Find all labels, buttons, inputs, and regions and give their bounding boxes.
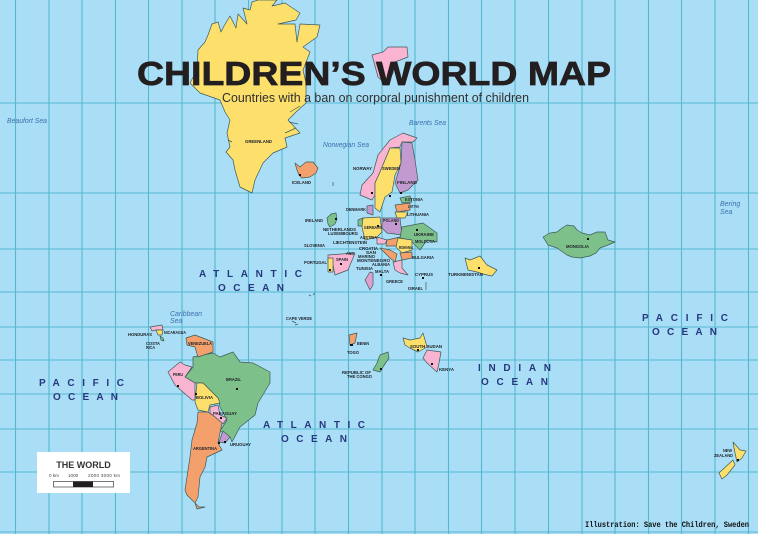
country labels: CYPRUS [415,272,434,278]
country labels: DENMARK [346,207,366,213]
Spain [328,253,355,275]
Uruguay [219,431,230,443]
sea labels: Sea [170,318,183,325]
Nicaragua [156,330,163,335]
country labels: MONGOLIA [566,244,589,250]
Greenland [190,0,320,193]
country labels: COSTA [146,341,160,347]
capital markers [177,174,739,461]
Denmark [367,205,373,215]
country labels: BULGARIA [412,255,434,261]
country labels: ZEALAND [714,453,733,459]
Republic of the Congo [373,352,389,372]
country labels: TOGO [347,350,359,356]
country labels: PORTUGAL [304,260,327,266]
ocean labels [39,269,728,445]
country labels: FINLAND [397,180,417,186]
sea labels: Barents Sea [409,120,446,127]
country labels: THE CONGO [347,374,372,380]
Svalbard [372,47,408,85]
legend: the world scale bar: 2000 3000 km [88,473,120,478]
Costa Rica [160,336,164,341]
country labels: MOLDOVA [415,239,435,245]
country labels: MONTENEGRO [357,258,390,264]
country labels: UKRAINE [414,232,435,238]
legend: the world scale bar: 1000 [68,473,79,478]
sea labels: Sea [720,209,733,216]
country labels: LIECHTENSTEIN [333,240,367,246]
country labels: NEW [723,448,732,454]
country labels: SPAIN [336,257,348,263]
country labels: ISRAEL [408,286,423,292]
Ireland [327,213,337,227]
sea labels: Bering [720,201,740,208]
Tunisia [365,272,373,290]
Bulgaria [400,252,412,260]
country labels: AND [346,251,354,257]
country labels: ARGENTINA [193,446,217,452]
Argentina [185,412,222,509]
sea labels: Norwegian Sea [323,142,369,149]
Iceland [295,162,318,178]
Cape Verde and small islands [292,182,426,325]
land masses [150,0,746,509]
country labels: AUSTRIA [360,235,377,241]
country labels: ESTONIA [405,197,423,203]
country labels: KENYA [439,367,454,373]
legend: the world scale bar [37,452,130,493]
Paraguay [210,405,227,424]
ocean labels: OCEAN [53,392,118,403]
ocean labels: INDIAN [478,363,551,374]
Sweden [375,148,401,212]
country labels: GERMANY [364,225,383,231]
sea labels [7,118,740,325]
country labels: GREENLAND [245,139,272,145]
ocean labels: PACIFIC [642,313,728,324]
Greece [393,260,408,275]
Bolivia [195,383,220,412]
country labels: PARAGUAY [213,411,238,417]
country labels: SOUTH SUDAN [410,344,442,350]
Lithuania [395,212,408,218]
country labels: BOLIVIA [196,395,213,401]
ocean labels: ATLANTIC [199,269,302,280]
Ukraine [400,223,437,250]
country labels: CROATIA [359,246,378,252]
Finland [395,142,418,193]
Turkmenistan [465,256,497,276]
country labels: BENIN [357,341,369,347]
legend: the world scale bar: 0 km [49,473,59,478]
ocean labels: OCEAN [281,434,347,445]
country labels: LATVIA [408,204,419,210]
Peru [168,362,195,400]
country labels: HONDURAS [128,332,153,338]
country labels: ROMANIA [399,245,413,251]
country labels: NICARAGUA [164,330,186,336]
country labels: URUGUAY [230,442,252,448]
country labels: SAN [366,250,377,256]
ocean labels: OCEAN [218,283,284,294]
Balkans [380,248,397,262]
Honduras [150,325,163,331]
country labels [128,139,733,459]
Germany [362,217,382,240]
country labels: SWEDEN [382,166,400,172]
country labels: SLOVENIA [304,243,325,249]
Latvia [395,203,410,212]
ocean labels: OCEAN [481,377,548,388]
Brazil [185,352,270,442]
country labels: LUXEMBOURG [328,231,358,237]
Poland [382,218,402,235]
country labels: NETHERLANDS [323,227,357,233]
country labels: BRAZIL [226,377,241,383]
sea labels: Beaufort Sea [7,118,47,125]
legend: the world scale bar: THE WORLD [56,460,111,470]
country labels: MALTA [375,269,389,275]
sea labels: Caribbean [170,311,202,318]
Benin and Togo [349,333,357,345]
Venezuela [186,335,213,357]
country labels: MARINO [358,254,375,260]
country labels: TUNISIA [356,266,373,272]
country labels: PERU [173,372,183,378]
Kenya [423,350,441,372]
ocean labels: PACIFIC [39,378,124,389]
South Sudan [403,333,427,352]
Austria [377,237,387,244]
New Zealand [719,442,746,479]
ocean labels: OCEAN [652,327,717,338]
title: CHILDREN’S WORLD MAP [137,55,611,92]
Hungary [386,237,400,246]
country labels: NORWAY [353,166,373,172]
country labels: VENEZUELA [188,341,212,347]
Mongolia [543,225,615,258]
country labels: TURKMENISTAN [448,272,483,278]
country labels: ALBANIA [372,262,390,268]
country labels: IRELAND [305,218,323,224]
Portugal [328,258,333,272]
Norway [360,133,417,200]
Netherlands [358,218,363,226]
country labels: CAPE VERDE [286,316,313,322]
Romania [396,238,412,253]
country labels: ICELAND [292,180,311,186]
country labels: LITHUANIA [407,212,429,218]
country labels: RICA [146,345,155,351]
country labels: REPUBLIC OF [342,370,371,376]
Estonia [400,196,412,203]
country labels: POLAND [383,218,399,224]
ocean labels: ATLANTIC [263,420,365,431]
subtitle: Countries with a ban on corporal punishment of children [222,91,529,105]
country labels: GREECE [386,279,404,285]
